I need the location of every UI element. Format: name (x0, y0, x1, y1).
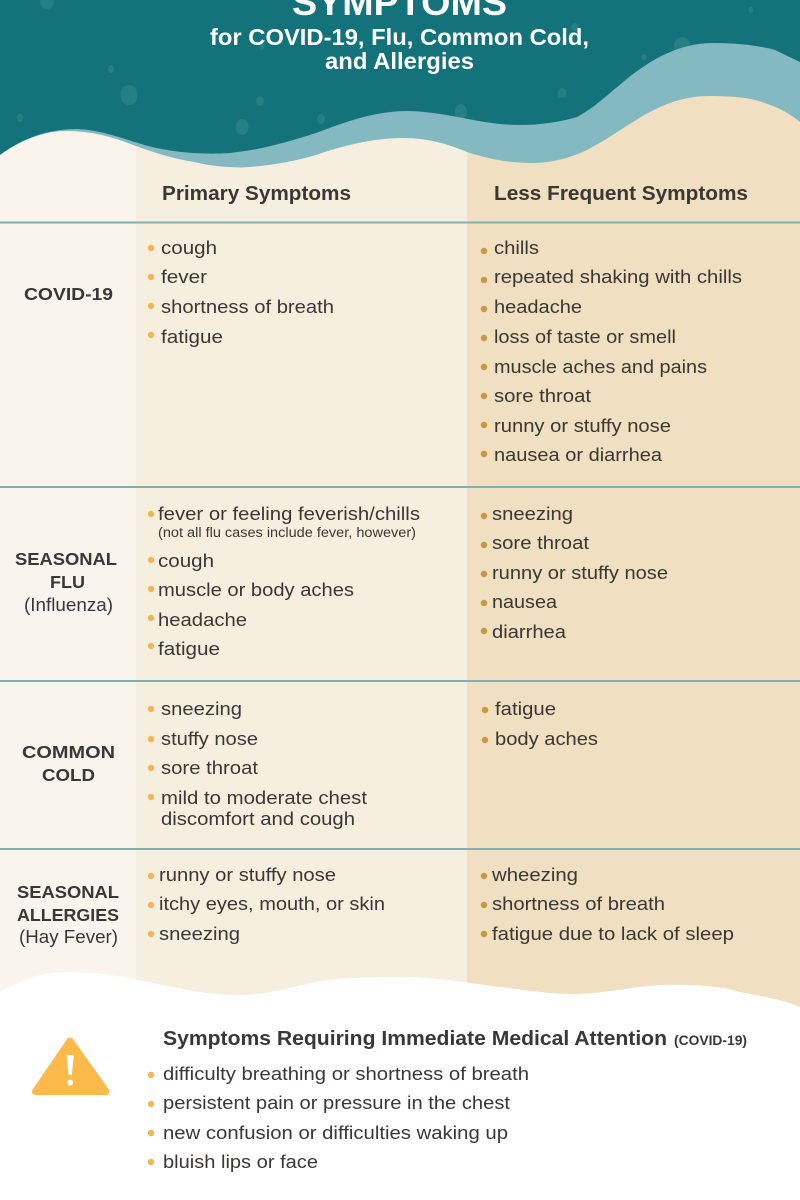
primary symptoms: discomfort and cough (161, 808, 355, 829)
row label: COMMON (22, 742, 115, 762)
primary symptoms: sneezing (161, 698, 242, 719)
primary symptoms: cough (161, 237, 217, 258)
row label: COLD (42, 765, 95, 785)
urgent symptoms list: difficulty breathing or shortness of breath (163, 1063, 529, 1084)
less frequent symptoms: body aches (495, 728, 598, 749)
row label: (Hay Fever) (19, 927, 118, 947)
less frequent symptoms: fatigue due to lack of sleep (492, 923, 734, 944)
primary symptoms: runny or stuffy nose (159, 864, 336, 885)
less frequent symptoms (482, 698, 598, 749)
primary symptoms: (not all flu cases include fever, however) (158, 525, 416, 540)
row label: ALLERGIES (17, 905, 119, 925)
column headers: Primary Symptoms (162, 183, 351, 205)
column headers: Less Frequent Symptoms (494, 183, 748, 205)
less frequent symptoms: wheezing (491, 864, 578, 885)
primary symptoms: muscle or body aches (158, 579, 354, 600)
less frequent symptoms (481, 864, 734, 944)
primary symptoms: fever or feeling feverish/chills (158, 503, 420, 524)
light teal wave (0, 43, 800, 240)
less frequent symptoms: nausea (492, 591, 558, 612)
less frequent symptoms: runny or stuffy nose (492, 562, 668, 583)
urgent symptoms list: bluish lips or face (163, 1151, 318, 1172)
primary symptoms: fever (161, 266, 207, 287)
urgent symptoms heading: Symptoms Requiring Immediate Medical Attention (163, 1027, 667, 1050)
row label (22, 742, 115, 785)
urgent symptoms heading: (COVID-19) (674, 1033, 747, 1048)
header band (0, 0, 800, 240)
less frequent symptoms: headache (494, 296, 582, 317)
less frequent symptoms: nausea or diarrhea (494, 444, 663, 465)
column headers (162, 183, 748, 205)
less frequent symptoms: loss of taste or smell (494, 326, 676, 347)
row label (15, 549, 117, 615)
less frequent symptoms: muscle aches and pains (494, 356, 707, 377)
less frequent symptoms (481, 237, 742, 465)
less frequent symptoms: fatigue (495, 698, 556, 719)
primary symptoms: sneezing (159, 923, 240, 944)
primary symptoms: shortness of breath (161, 296, 334, 317)
primary symptoms: cough (158, 550, 214, 571)
row label (17, 882, 119, 947)
primary symptoms: stuffy nose (161, 728, 258, 749)
row: seasonal flu (15, 503, 668, 659)
row label: COVID-19 (24, 284, 113, 304)
primary symptoms: itchy eyes, mouth, or skin (159, 893, 385, 914)
primary symptoms (148, 237, 334, 347)
urgent symptoms list: persistent pain or pressure in the chest (163, 1092, 510, 1113)
title: for COVID-19, Flu, Common Cold, (210, 24, 589, 50)
urgent symptoms list (148, 1063, 529, 1172)
less frequent symptoms (481, 503, 668, 642)
table columns (0, 96, 800, 1030)
less frequent symptoms: runny or stuffy nose (494, 415, 671, 436)
icon: warning triangle (36, 1041, 106, 1092)
primary symptoms (148, 864, 385, 944)
row label: FLU (50, 572, 85, 592)
less frequent symptoms: shortness of breath (492, 893, 665, 914)
row label: SEASONAL (15, 549, 117, 569)
primary symptoms: fatigue (161, 326, 223, 347)
urgent symptoms list: new confusion or difficulties waking up (163, 1122, 508, 1143)
row: seasonal allergies (17, 864, 734, 947)
primary symptoms: headache (158, 609, 247, 630)
row label: (Influenza) (24, 595, 113, 615)
primary symptoms: fatigue (158, 638, 220, 659)
less frequent symptoms: repeated shaking with chills (494, 266, 742, 287)
row: COVID-19 (24, 237, 742, 465)
less frequent symptoms: sneezing (492, 503, 573, 524)
row label: SEASONAL (17, 882, 119, 902)
white bottom wave (0, 972, 800, 1200)
less frequent symptoms: chills (494, 237, 539, 258)
less frequent symptoms: sore throat (494, 385, 591, 406)
primary symptoms (148, 698, 367, 829)
primary symptoms (148, 503, 420, 659)
title: and Allergies (325, 48, 474, 74)
title (210, 0, 589, 74)
primary symptoms: mild to moderate chest (161, 787, 367, 808)
row: common cold (22, 698, 598, 829)
less frequent symptoms: diarrhea (492, 621, 567, 642)
primary symptoms: sore throat (161, 757, 258, 778)
less frequent symptoms: sore throat (492, 532, 589, 553)
